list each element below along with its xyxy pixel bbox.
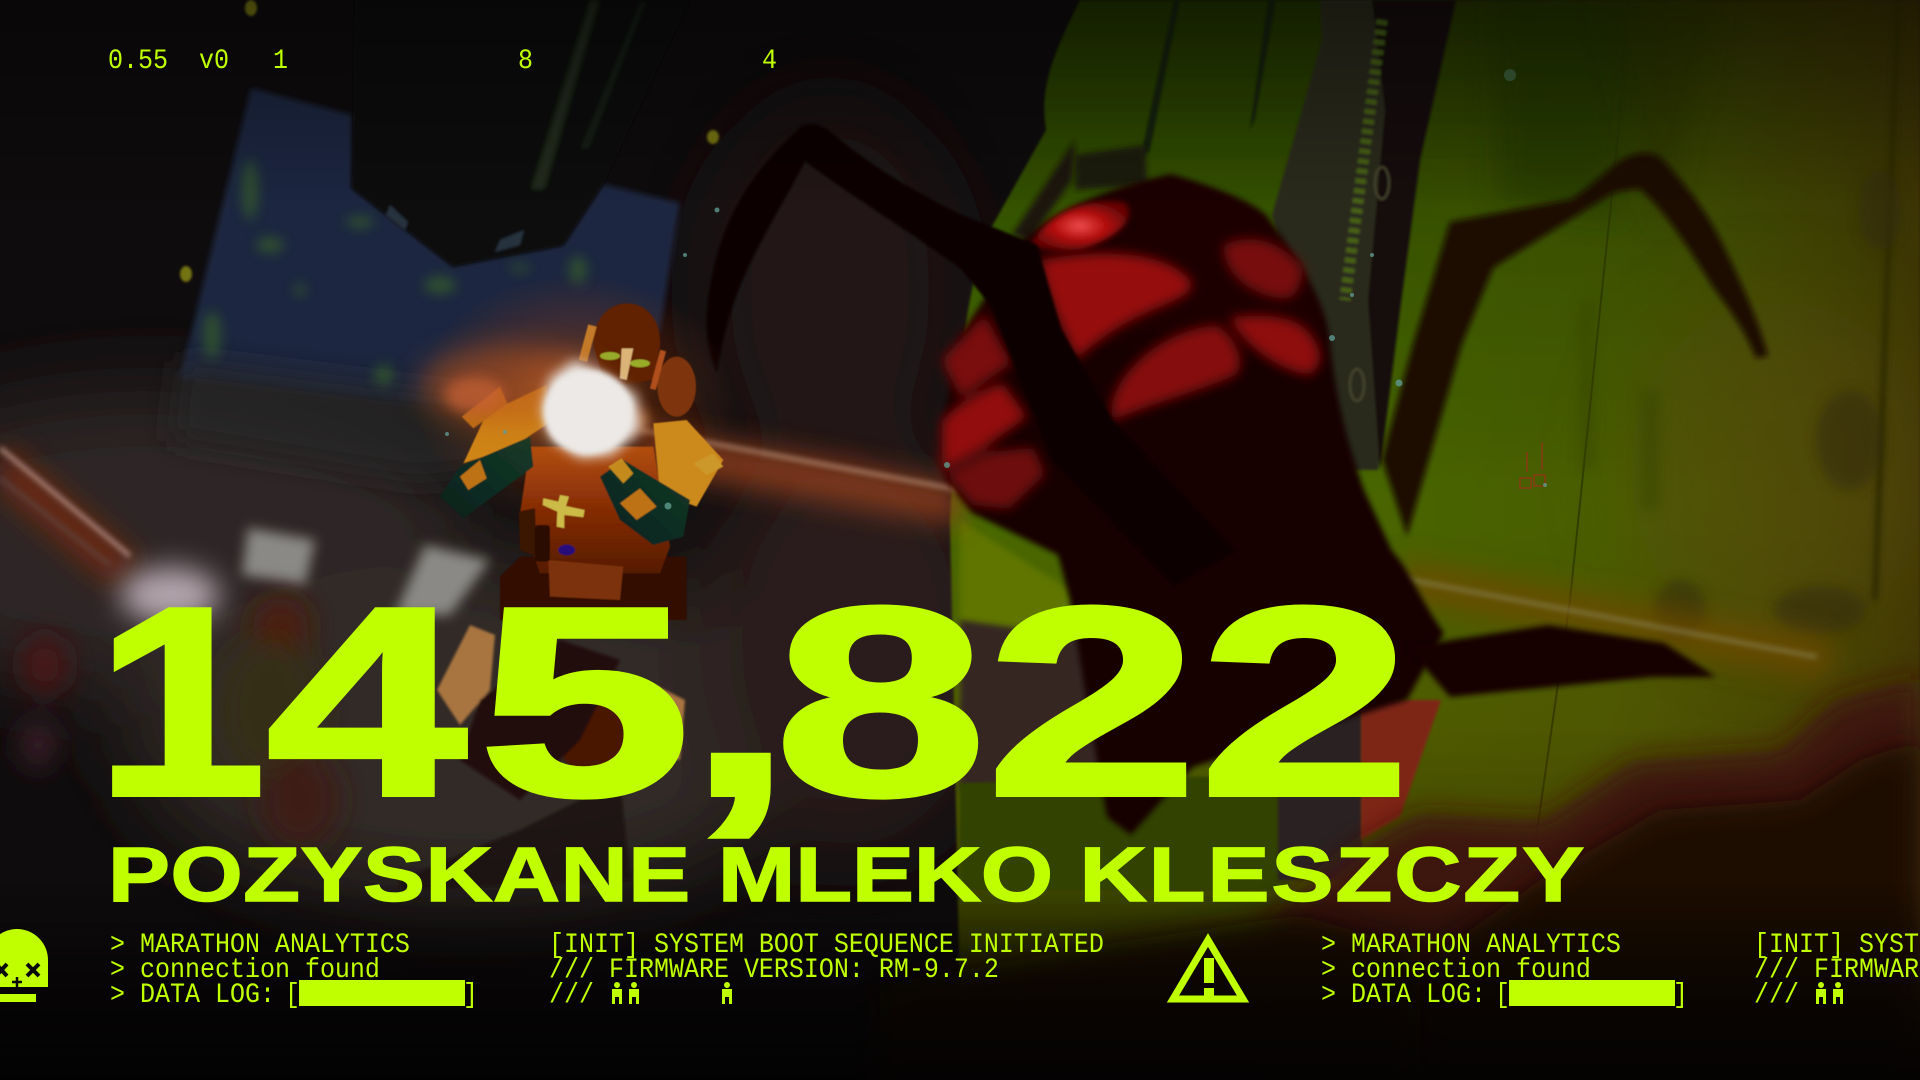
red wall marks — [1520, 442, 1545, 488]
ceiling structure — [352, 0, 692, 266]
terminal init block right: /// — [1754, 979, 1799, 1011]
terminal log right: > MARATHON ANALYTICS — [1321, 929, 1621, 961]
spider red glowing patches — [942, 239, 1320, 509]
soldier — [400, 275, 735, 890]
muzzle flash — [420, 347, 650, 458]
terminal log left — [110, 929, 478, 1011]
top readout: 8 — [518, 45, 533, 77]
terminal init block: [INIT] SYSTEM BOOT SEQUENCE INITIATED — [549, 929, 1104, 961]
terminal log right: [ — [1495, 979, 1510, 1011]
laser beam right — [1345, 552, 1830, 680]
progress bar right — [1509, 980, 1675, 1006]
subtitle: POZYSKANE — [108, 832, 691, 918]
blurred background soldier — [20, 597, 340, 848]
terminal log left: > MARATHON ANALYTICS — [110, 929, 410, 961]
terminal init block: /// — [549, 979, 594, 1011]
lower wall panels — [960, 520, 1441, 890]
terminal log right — [1321, 929, 1688, 1011]
green specks on window — [203, 160, 587, 385]
icon: skull — [0, 929, 48, 1002]
progress bar left — [299, 980, 465, 1006]
main number: 1 — [95, 552, 266, 853]
soldier chest cross — [543, 495, 585, 528]
terminal log left: > DATA LOG: — [110, 979, 275, 1011]
terminal log left: > connection found — [110, 954, 380, 986]
terminal log right: > connection found — [1321, 954, 1591, 986]
wall pillar — [1272, 0, 1456, 470]
beam from muzzle — [640, 425, 960, 525]
left laser — [0, 440, 220, 623]
top readout: 0.55 — [108, 45, 168, 77]
main number: 5,822 — [478, 552, 1412, 853]
terminal log left: [ — [285, 979, 300, 1011]
terminal init block: /// FIRMWARE VERSION: RM-9.7.2 — [549, 954, 999, 986]
icon: people — [612, 982, 732, 1004]
main number: 4 — [266, 551, 470, 853]
top readout: 1 — [273, 45, 288, 77]
icon: people right — [1816, 982, 1843, 1004]
spider body — [943, 174, 1444, 835]
terminal init block — [549, 929, 1104, 1011]
subtitle: KLESZCZY — [1080, 832, 1586, 918]
top readout: 4 — [762, 45, 777, 77]
terminal log left: ] — [463, 979, 478, 1011]
terminal log right: ] — [1673, 979, 1688, 1011]
spider creature — [707, 124, 1768, 835]
subtitle: MLEKO — [718, 832, 1053, 918]
terminal log right: > DATA LOG: — [1321, 979, 1486, 1011]
spider legs — [707, 124, 1768, 697]
top readout: v0 — [199, 45, 229, 77]
lower soldier parts — [400, 625, 685, 890]
floor lights — [242, 528, 490, 615]
foreground mound — [1270, 677, 1920, 1080]
scattered particles — [445, 69, 1547, 510]
blue window — [180, 88, 680, 410]
green wall — [950, 0, 1920, 1000]
icon: warning triangle — [1173, 940, 1243, 999]
terminal init block right — [1754, 929, 1920, 1011]
top readout — [108, 45, 777, 77]
soldier figure — [440, 303, 723, 620]
